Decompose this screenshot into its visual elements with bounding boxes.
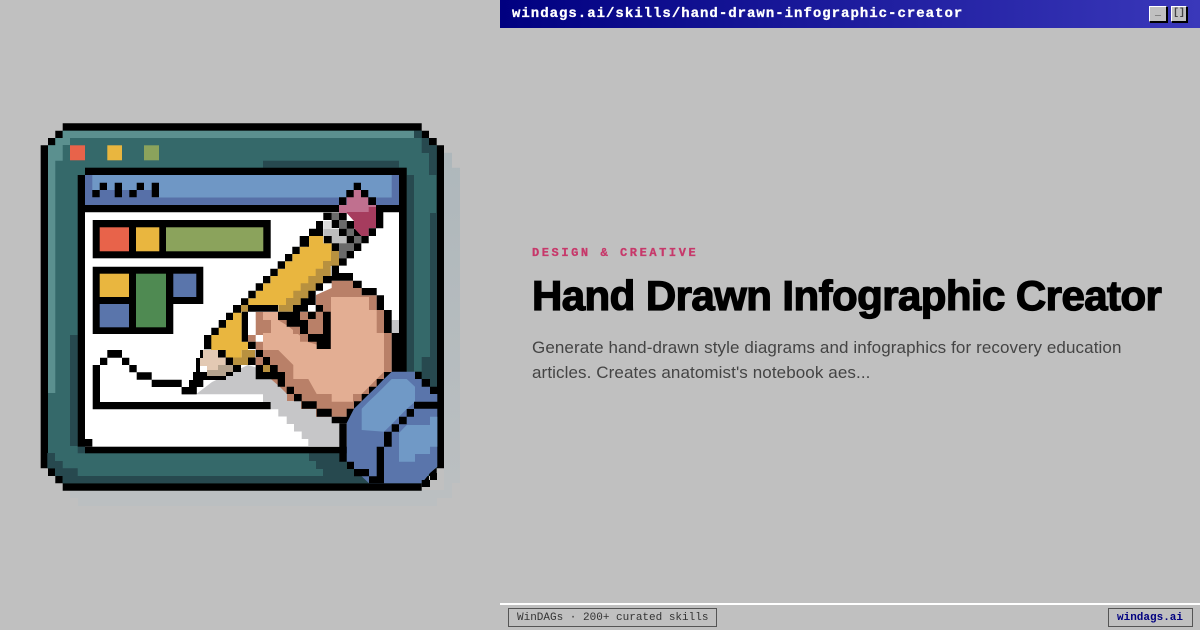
description: articles. Creates anatomist's notebook aes... xyxy=(532,363,870,382)
icon: inner window and title bar xyxy=(78,168,407,453)
icon: pencil shadow on paper xyxy=(196,365,346,446)
icon: window control squares xyxy=(70,145,159,160)
icon: hand-drawn line sketch xyxy=(93,350,271,409)
pixel art icon: browser window with hand drawing xyxy=(40,123,460,491)
status badge xyxy=(508,608,717,627)
icon drop shadow xyxy=(70,153,460,506)
icon: top colour swatch panel xyxy=(93,220,271,258)
minimise button: _ xyxy=(1155,8,1161,19)
description: Generate hand-drawn style diagrams and infographics for recovery education xyxy=(532,338,1122,357)
icon: hand xyxy=(248,273,399,423)
icon: pencil metal ferrule xyxy=(323,213,361,273)
minimise button xyxy=(1149,6,1167,22)
brand badge: windags.ai xyxy=(1117,612,1183,624)
icon: blue sleeve xyxy=(339,372,444,487)
icon: pencil xyxy=(182,221,339,394)
maximise button: [] xyxy=(1173,8,1185,19)
status badge: WinDAGs · 200+ curated skills xyxy=(517,612,708,624)
title bar xyxy=(500,0,1200,28)
heading: Hand Drawn Infographic Creator xyxy=(532,272,1161,319)
pencil outlines xyxy=(182,221,323,394)
icon: pencil eraser xyxy=(339,183,383,243)
maximise button xyxy=(1171,6,1187,22)
hand shading and finger outlines xyxy=(256,312,323,342)
bottom status bar xyxy=(500,603,1200,630)
brand badge xyxy=(1108,608,1193,627)
icon: grid chart panel xyxy=(93,267,203,334)
title bar URL: windags.ai/skills/hand-drawn-infographic-creator xyxy=(512,6,963,22)
description xyxy=(532,338,1122,382)
icon: window frame xyxy=(41,123,444,491)
category label: DESIGN & CREATIVE xyxy=(532,246,698,260)
